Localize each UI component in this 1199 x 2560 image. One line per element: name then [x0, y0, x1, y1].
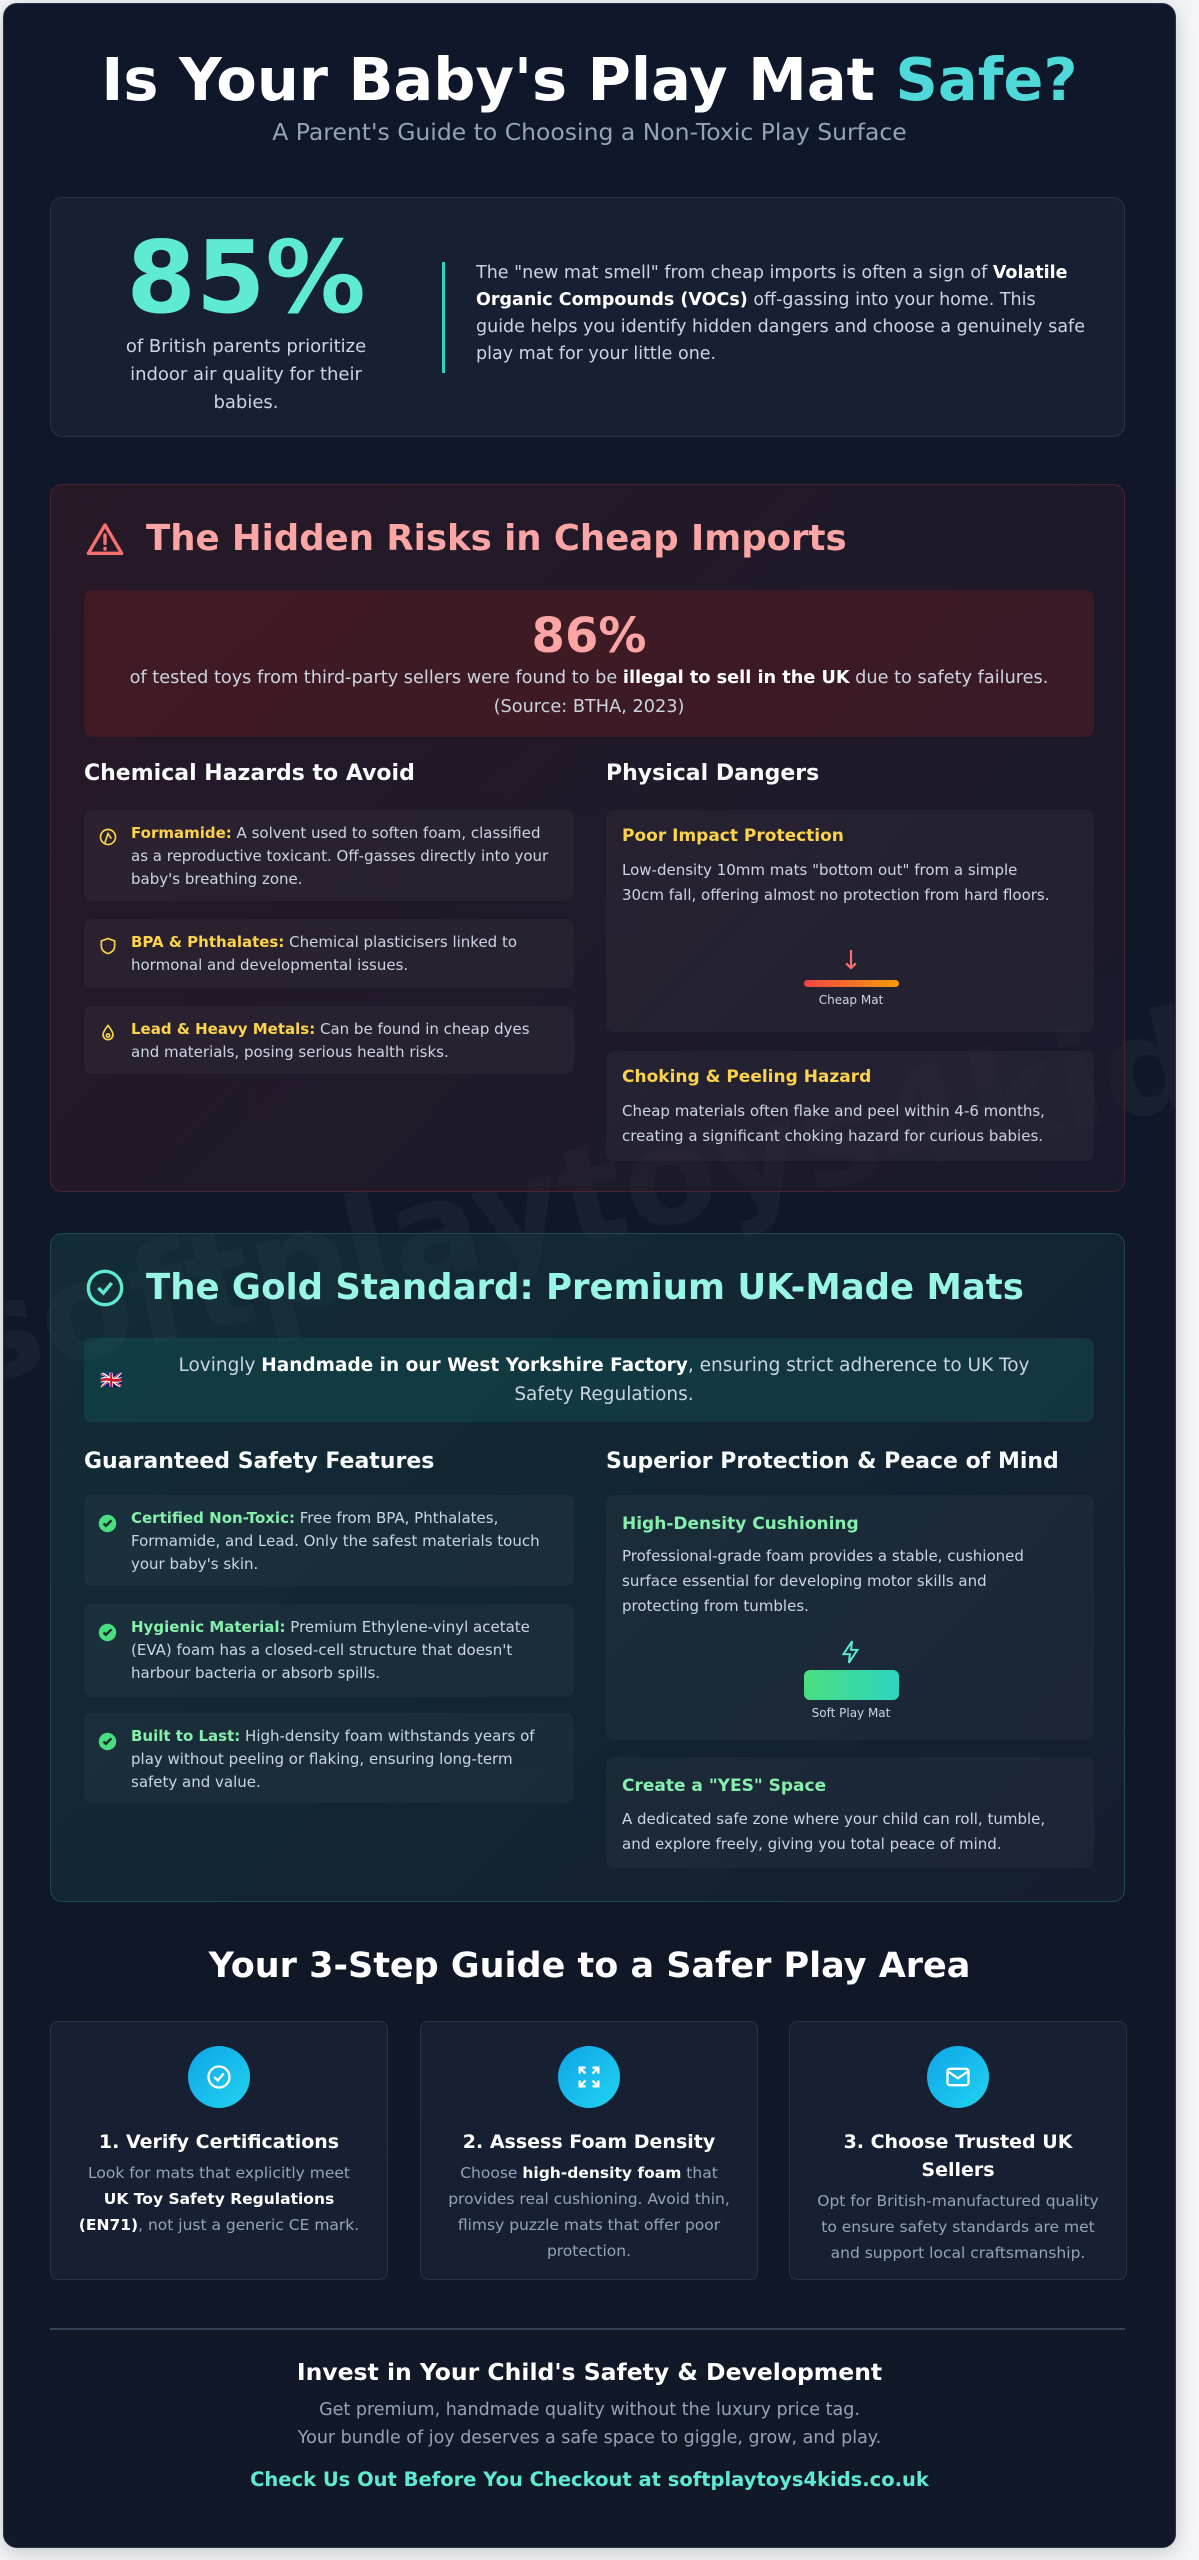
step 1 — [50, 2021, 388, 2280]
intro text: The "new mat smell" from cheap imports is often a sign of Volatile Organic Compounds (VOCs) off-gassing into your home. This guide helps you identify hidden dangers and choose a genuinely safe play mat for your little one. — [476, 263, 1085, 364]
step 2 — [420, 2021, 758, 2280]
card: impact: Poor Impact Protection — [622, 826, 844, 846]
step 3 — [789, 2021, 1127, 2280]
item: built to last — [84, 1713, 574, 1803]
card: choking — [606, 1051, 1094, 1161]
column: safety features: Guaranteed Safety Features — [84, 1449, 434, 1474]
callout: 86%: of tested toys from third-party sellers were found to be illegal to sell in the UK due to safety failures. — [130, 668, 1048, 688]
title: Is Your Baby's Play Mat Safe? — [101, 45, 1078, 114]
heading: The Gold Standard: Premium UK-Made Mats — [146, 1267, 1024, 1308]
panel: gold standard — [50, 1233, 1125, 1902]
icon: expand — [558, 2046, 620, 2108]
banner: handmade: Lovingly Handmade in our West Yorkshire Factory, ensuring strict adherence to UK Toy Safety Regulations. — [178, 1355, 1030, 1405]
column: superior protection: Superior Protection & Peace of Mind — [606, 1449, 1059, 1474]
stat 85%: of British parents prioritize indoor air quality for their babies. — [126, 336, 366, 413]
card: yes space: A dedicated safe zone where your child can roll, tumble, and explore freely, giving you total peace of mind. — [622, 1810, 1045, 1853]
item: non-toxic — [84, 1495, 574, 1586]
step 1: 1. Verify Certifications — [99, 2131, 339, 2153]
heading: 3-step guide: Your 3-Step Guide to a Safer Play Area — [209, 1946, 970, 1986]
stat 85% — [126, 219, 366, 413]
card: choking: Choking & Peeling Hazard — [622, 1067, 871, 1087]
footer: Your bundle of joy deserves a safe space to giggle, grow, and play. — [298, 2428, 881, 2448]
column: chemical hazards: Chemical Hazards to Avoid — [84, 761, 415, 786]
banner: handmade — [84, 1338, 1094, 1422]
column: chemical hazards — [84, 761, 548, 1061]
step 2: Choose high-density foam that provides real cushioning. Avoid thin, flimsy puzzle mats that offer poor protection. — [448, 2164, 730, 2260]
item: hygienic — [84, 1604, 574, 1697]
icon: warning — [86, 523, 124, 555]
step 1: UK Toy Safety Regulations — [104, 2190, 334, 2208]
step 3: 3. Choose Trusted UK Sellers — [844, 2131, 1072, 2181]
step 3: Opt for British-manufactured quality to ensure safety standards are met and support local craftsmanship. — [817, 2192, 1099, 2262]
card: impact: Low-density 10mm mats "bottom out" from a simple — [622, 861, 1017, 879]
icon: falling arrow and cheap mat: Cheap Mat — [819, 993, 883, 1007]
icon: soft play mat: Soft Play Mat — [812, 1706, 890, 1720]
column: physical dangers: Physical Dangers — [606, 761, 819, 786]
item: BPA: BPA & Phthalates: Chemical plasticisers linked to hormonal and developmental issues. — [131, 933, 517, 974]
card: cushioning — [606, 1495, 1094, 1740]
card: impact — [606, 810, 1094, 1032]
banner: handmade: 🇬🇧 — [100, 1370, 122, 1391]
card: cushioning: Professional-grade foam provides a stable, cushioned surface essential for developing motor skills and protecting from tumbles. — [622, 1547, 1024, 1615]
item: BPA — [84, 919, 574, 988]
card: impact: 30cm fall, offering almost no protection from hard floors. — [622, 886, 1050, 904]
icon: falling arrow and cheap mat: ↓ — [840, 946, 862, 976]
column: superior protection — [606, 1449, 1059, 1853]
icon: falling arrow and cheap mat — [804, 946, 899, 1007]
column: safety features — [84, 1449, 540, 1791]
footer: Invest in Your Child's Safety & Development — [297, 2358, 882, 2386]
call to action: Check Us Out Before You Checkout at softplaytoys4kids.co.uk — [250, 2468, 929, 2491]
step 1: Look for mats that explicitly meet — [88, 2164, 350, 2182]
step 1: (EN71), not just a generic CE mark. — [79, 2216, 359, 2234]
item: lead — [84, 1006, 574, 1074]
icon: check circle — [86, 1270, 124, 1306]
icon: mail — [927, 2046, 989, 2108]
column: physical dangers — [606, 761, 1050, 1145]
callout: 86%: (Source: BTHA, 2023) — [494, 697, 684, 717]
item: formamide — [84, 810, 574, 901]
stat 85%: 85% — [126, 219, 366, 336]
panel: hidden risks — [50, 484, 1125, 1192]
callout: 86% — [84, 590, 1094, 737]
item: non-toxic: Certified Non-Toxic: Free from BPA, Phthalates, Formamide, and Lead. Only the safest materials touch your baby's skin. — [131, 1509, 540, 1573]
item: formamide: Formamide: A solvent used to soften foam, classified as a reproductive toxicant. Off-gasses directly into your baby's breathing zone. — [131, 824, 548, 888]
callout: 86%: 86% — [532, 608, 646, 664]
card: yes space: Create a "YES" Space — [622, 1776, 826, 1796]
card: choking: Cheap materials often flake and peel within 4-6 months, creating a significant choking hazard for curious babies. — [622, 1102, 1045, 1145]
item: hygienic: Hygienic Material: Premium Ethylene-vinyl acetate (EVA) foam has a closed-cell structure that doesn't harbour bacteria or absorb spills. — [131, 1618, 530, 1682]
icon: soft play mat — [804, 1640, 899, 1720]
card: yes space — [606, 1757, 1094, 1868]
step 2: 2. Assess Foam Density — [463, 2131, 715, 2153]
icon: check — [188, 2046, 250, 2108]
footer — [250, 2358, 930, 2491]
heading: The Hidden Risks in Cheap Imports — [146, 518, 847, 559]
footer: Get premium, handmade quality without the luxury price tag. — [319, 2400, 860, 2420]
item: lead: Lead & Heavy Metals: Can be found in cheap dyes and materials, posing serious health risks. — [131, 1020, 530, 1061]
subtitle: A Parent's Guide to Choosing a Non-Toxic Play Surface — [272, 118, 907, 146]
card: cushioning: High-Density Cushioning — [622, 1514, 859, 1534]
item: built to last: Built to Last: High-density foam withstands years of play without peeling or flaking, ensuring long-term safety and value. — [131, 1727, 535, 1791]
panel: intro stat — [50, 197, 1125, 437]
